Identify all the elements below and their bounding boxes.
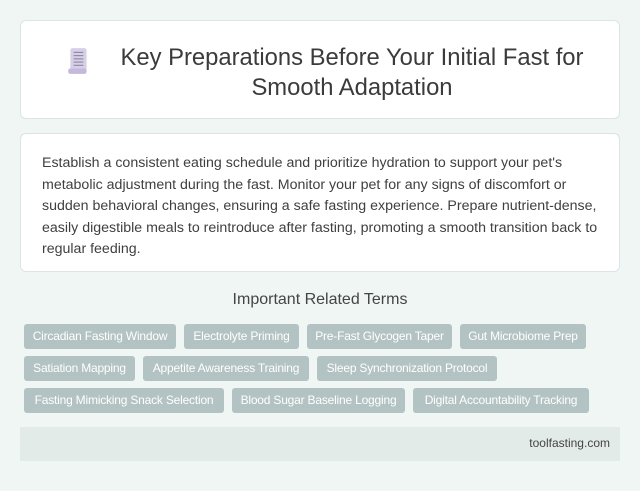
tags: Appetite Awareness Training bbox=[153, 361, 299, 375]
tags: Blood Sugar Baseline Logging bbox=[241, 393, 396, 407]
tags: Electrolyte Priming bbox=[193, 329, 290, 343]
description card bbox=[20, 133, 620, 272]
tags: Fasting Mimicking Snack Selection bbox=[35, 393, 213, 407]
footer source: toolfasting.com bbox=[529, 436, 610, 450]
footer bbox=[20, 427, 620, 461]
title card bbox=[20, 20, 620, 119]
tags: Satiation Mapping bbox=[33, 361, 126, 375]
icon: document bbox=[68, 48, 86, 74]
description text: Establish a consistent eating schedule and prioritize hydration to support your pet's metabolic adjustment during the fast. Monitor your pet for any signs of discomfort or sudden behavioral changes, ensuring a safe fasting experience. Prepare nutrient-dense, easily digestible meals to reintroduce after fasting, promoting a smooth transition back to regular feeding. bbox=[42, 155, 597, 257]
title: Key Preparations Before Your Initial Fast for Smooth Adaptation bbox=[120, 44, 583, 101]
tags: Pre-Fast Glycogen Taper bbox=[315, 329, 444, 343]
tags: Sleep Synchronization Protocol bbox=[327, 361, 487, 375]
heading: related terms: Important Related Terms bbox=[233, 291, 407, 308]
tags: Circadian Fasting Window bbox=[33, 329, 167, 343]
tags: Digital Accountability Tracking bbox=[425, 393, 577, 407]
tags: Gut Microbiome Prep bbox=[468, 329, 578, 343]
